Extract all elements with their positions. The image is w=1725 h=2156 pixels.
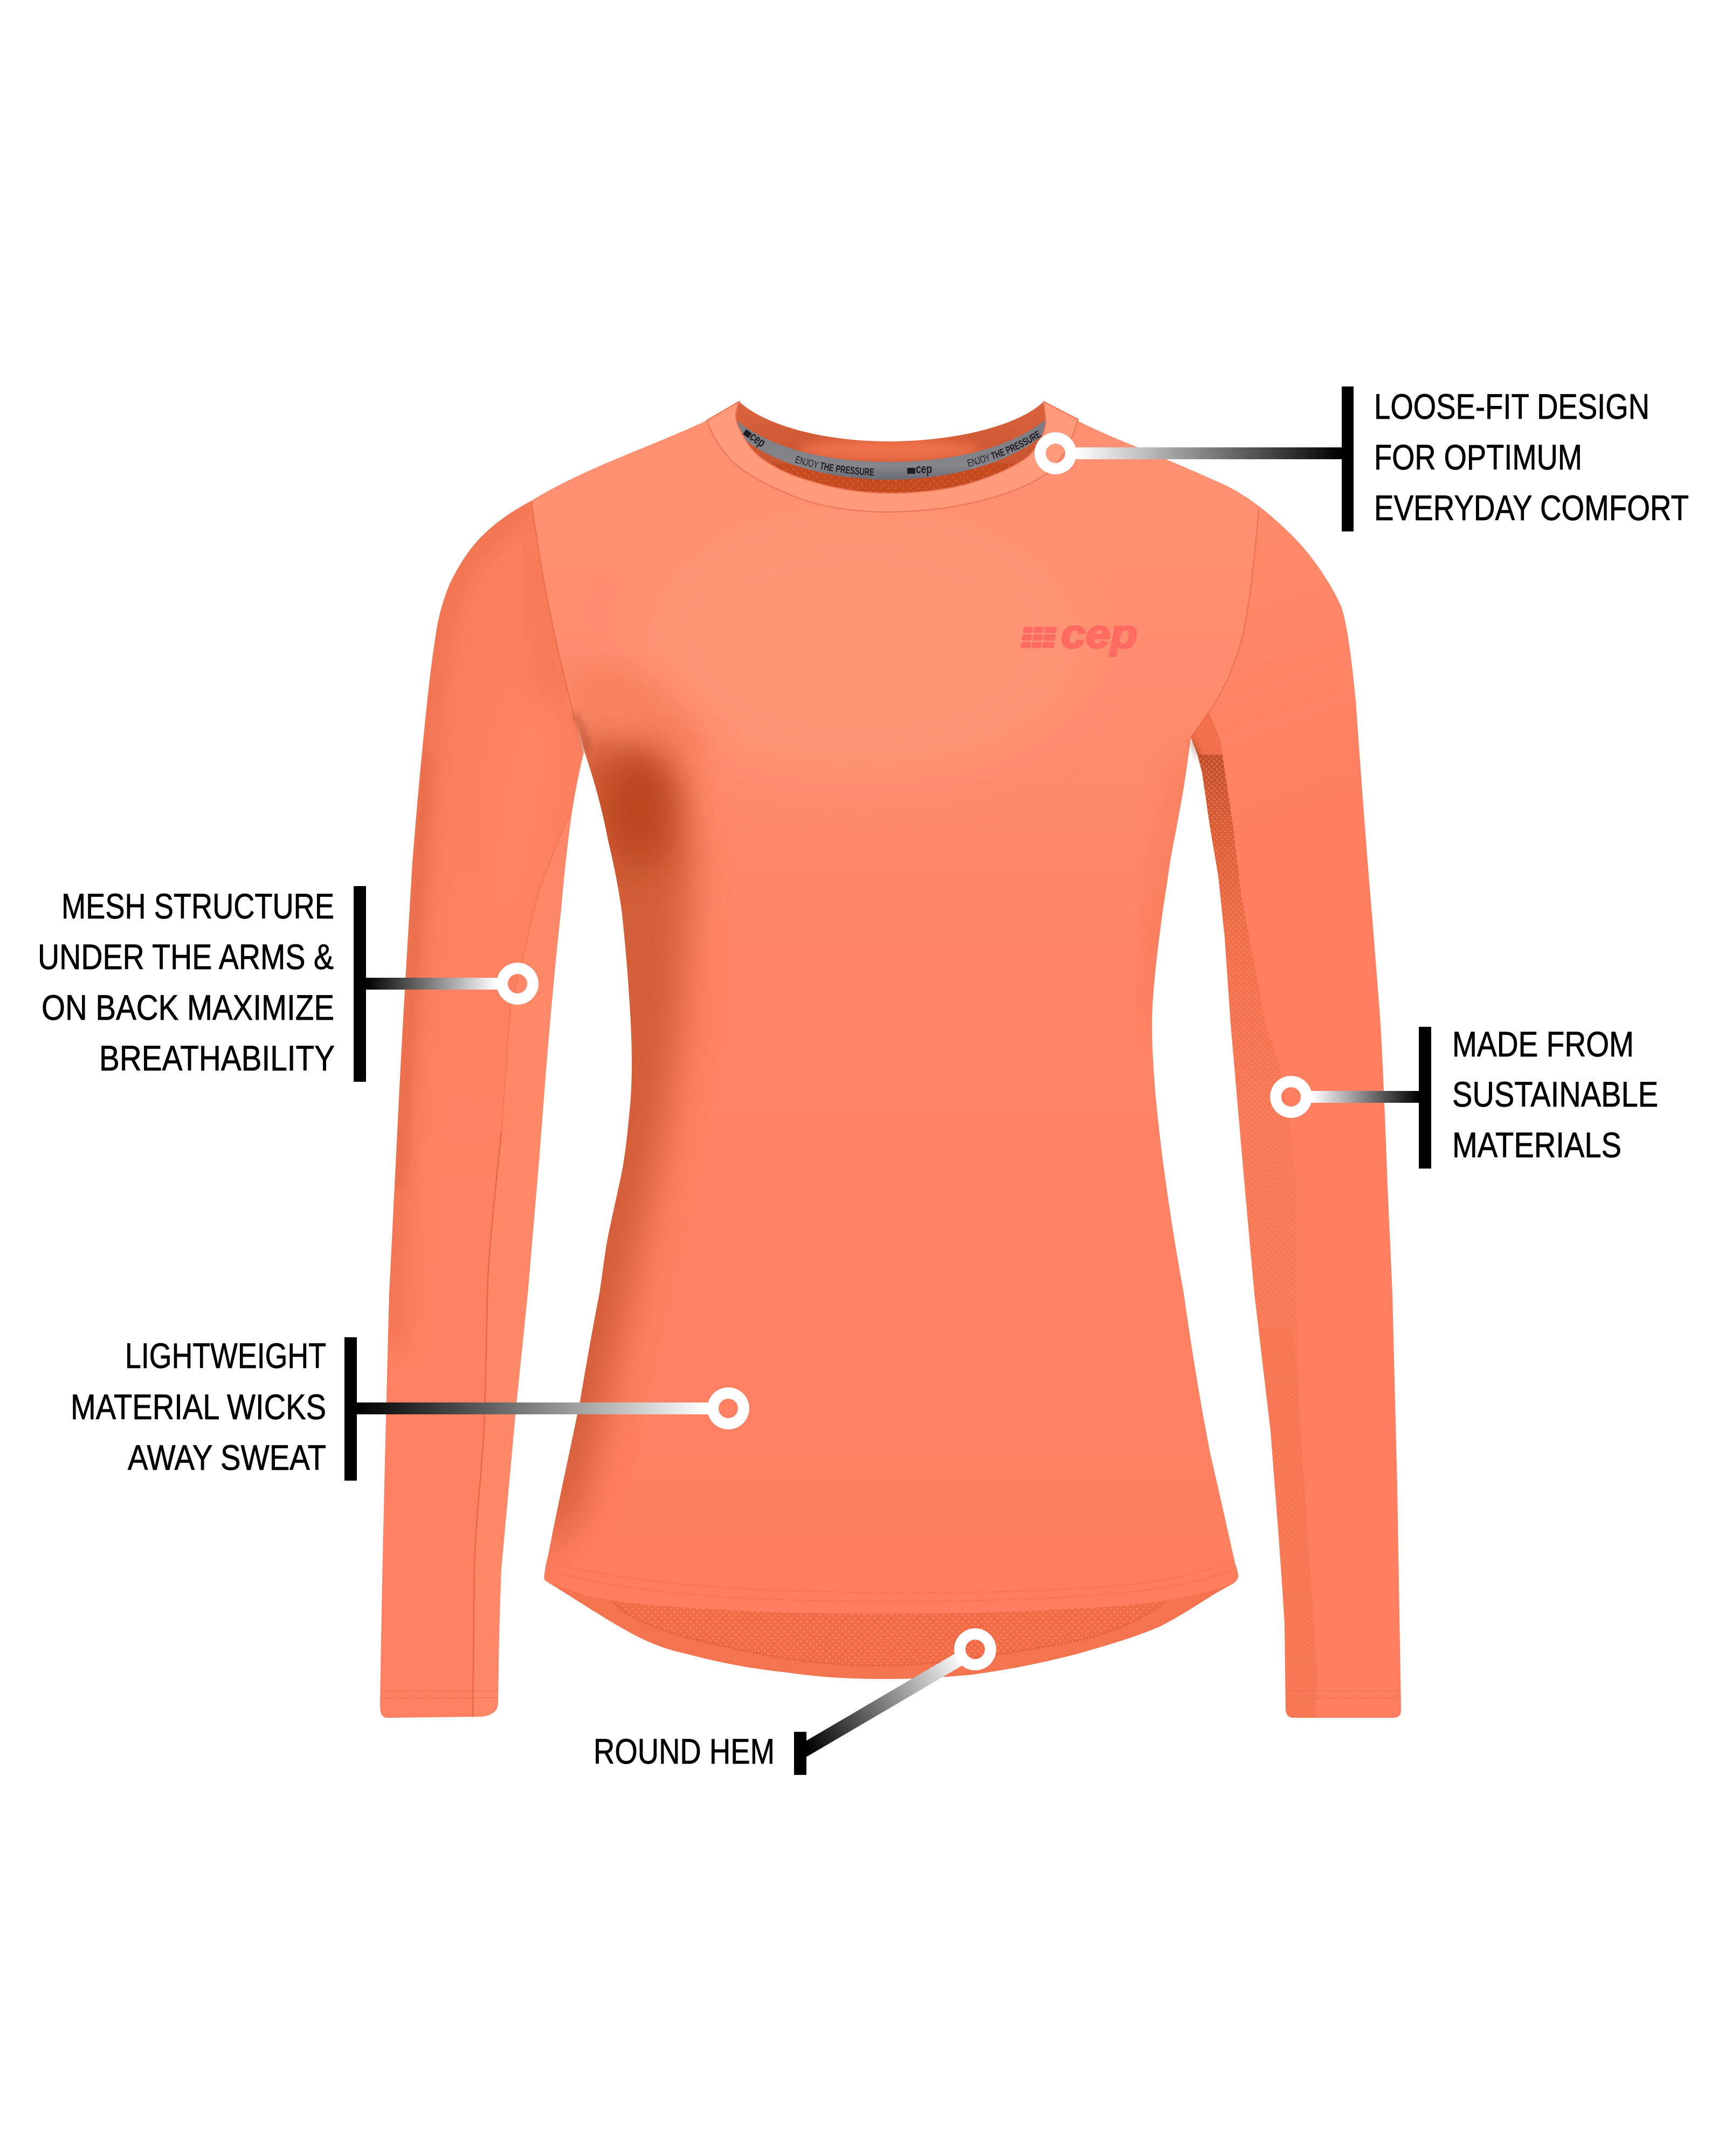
armpit creases <box>574 714 1199 757</box>
tape logo centre: cep <box>916 462 932 476</box>
label text: LOOSE-FIT DESIGN <box>1374 386 1650 426</box>
tape logo centre <box>907 466 932 476</box>
marker ring <box>1040 438 1071 469</box>
label text <box>1452 1024 1658 1165</box>
bar <box>794 1732 806 1775</box>
logo grid <box>1020 627 1057 648</box>
chest logo <box>1020 611 1137 657</box>
label text: FOR OPTIMUM <box>1374 437 1582 477</box>
label text: SUSTAINABLE <box>1452 1074 1658 1114</box>
label text: ROUND HEM <box>594 1731 775 1771</box>
label text: UNDER THE ARMS & <box>38 937 334 977</box>
neck interior <box>736 402 1045 493</box>
hem stitching <box>548 1560 1234 1593</box>
marker ring <box>960 1634 991 1664</box>
armhole seams <box>532 501 1259 754</box>
neck tape: ENJOY THE PRESSURE <box>967 430 1041 467</box>
bar <box>354 886 366 1082</box>
label text <box>71 1336 326 1477</box>
callout: loose-fit design <box>1040 386 1689 531</box>
callout: mesh structure <box>38 886 533 1082</box>
marker ring <box>1275 1081 1307 1112</box>
label text: ON BACK MAXIMIZE <box>42 987 334 1027</box>
tape text: ENJOY THE PRESSURE <box>795 456 874 475</box>
logo wordmark: cep <box>1061 611 1137 657</box>
label text: BREATHABILITY <box>99 1038 335 1078</box>
callout: lightweight material <box>71 1336 744 1481</box>
label text <box>38 886 335 1078</box>
bar <box>344 1337 357 1481</box>
label text: MADE FROM <box>1452 1024 1634 1064</box>
connector line <box>803 1657 962 1751</box>
collar band <box>707 402 1078 512</box>
tape logo left <box>741 425 768 450</box>
collar and neck <box>706 400 1079 513</box>
right sleeve <box>1191 487 1402 1719</box>
callout: sustainable materials <box>1275 1024 1658 1169</box>
label text: MATERIALS <box>1452 1125 1622 1165</box>
bar <box>1342 386 1354 531</box>
front body <box>532 402 1259 1614</box>
label text: LIGHTWEIGHT <box>125 1336 326 1376</box>
marker ring <box>713 1393 744 1424</box>
connector line <box>357 1402 713 1414</box>
bar <box>1419 1027 1431 1169</box>
tape logo left: cep <box>747 430 768 450</box>
back hem panel <box>546 1563 1235 1679</box>
connector line <box>1073 447 1342 459</box>
neck tape <box>737 420 1045 480</box>
callout: round hem <box>594 1634 991 1775</box>
label text: AWAY SWEAT <box>128 1438 326 1477</box>
label text: MESH STRUCTURE <box>61 886 334 926</box>
connector line <box>366 978 501 990</box>
left sleeve <box>377 501 583 1719</box>
left mesh panel <box>473 798 579 1719</box>
marker ring <box>502 968 533 999</box>
label text <box>1374 386 1689 528</box>
connector line <box>1307 1091 1419 1103</box>
right mesh panel <box>1191 741 1317 1719</box>
label text: MATERIAL WICKS <box>71 1387 326 1427</box>
shirt <box>380 400 1402 1718</box>
